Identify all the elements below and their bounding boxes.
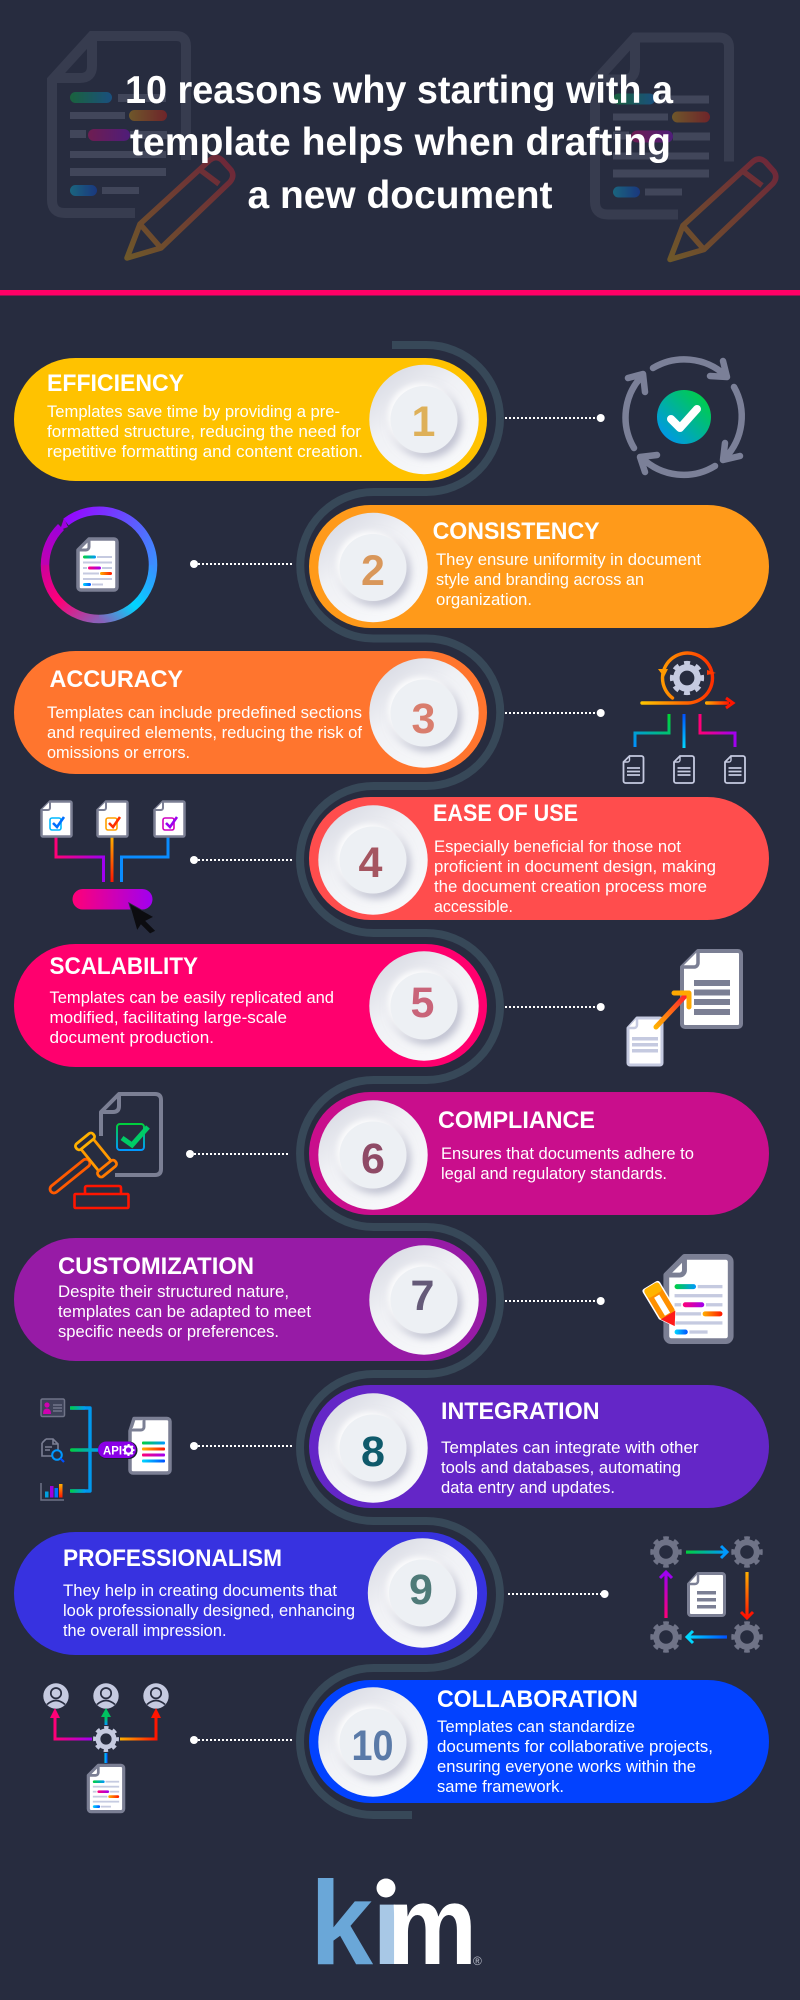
number disc 7 [369,1245,479,1355]
icon: API linking card, search and chart to document [41,1399,170,1500]
pink header rule [0,290,800,296]
body text: Templates can integrate with other [441,1439,699,1457]
body text: and required elements, reducing the risk of [47,724,362,742]
body text [441,1439,699,1497]
connector 10 [190,1736,294,1744]
connector 4 [190,856,294,864]
number 2: 2 [361,547,385,595]
connector 7 [505,1297,605,1305]
icon: gavel with approved document [38,1094,161,1208]
body text: Ensures that documents adhere to [441,1145,694,1163]
body text: Templates can standardize [437,1718,635,1736]
number 3: 3 [412,695,435,743]
body text: Templates can include predefined sections [47,704,362,722]
panel: customization [14,1238,487,1361]
icon: three checklists merging into a button with cursor [42,802,184,934]
logo: kim: k [310,1857,374,1990]
body text: templates can be adapted to meet [58,1303,311,1321]
connector 6 [186,1150,290,1158]
body text: tools and databases, automating [441,1459,681,1477]
number disc 2 [318,513,428,622]
number disc 6 [318,1100,428,1210]
connector 2 [190,560,294,568]
number disc 1 [369,365,479,474]
body text: legal and regulatory standards. [441,1165,667,1183]
icon: faded document and pencil, left [52,36,233,258]
icon: refresh cycle with check [626,359,742,475]
icon: API linking card, search and chart to document: API [103,1444,122,1458]
icon: small document scaling to large document [628,951,741,1065]
body text: Especially beneficial for those not [434,838,681,856]
connector 3 [505,709,605,717]
connector 1 [505,414,605,422]
heading: COLLABORATION [437,1686,638,1713]
logo: kim: m [387,1863,477,1988]
body text: omissions or errors. [47,744,190,762]
heading: ACCURACY [50,666,183,693]
number disc 9 [368,1538,477,1648]
body text: Templates save time by providing a pre- [47,403,340,421]
title: 10 reasons why starting with a [125,69,674,112]
connector 9 [508,1590,609,1598]
body text: formatted structure, reducing the need for [47,423,362,441]
panel: integration [309,1385,769,1508]
number 1: 1 [412,398,435,446]
panel: ease of use [309,797,769,920]
body text [58,1283,311,1341]
body text: the document creation process more [434,878,707,896]
body text [47,704,362,762]
panel: compliance [309,1092,769,1215]
body text: modified, facilitating large-scale [50,1009,287,1027]
body text: same framework. [437,1778,564,1796]
icon: document with pencil [641,1257,731,1341]
logo: kim: ® [473,1954,482,1968]
panel: scalability [14,944,487,1067]
number 6: 6 [361,1135,385,1183]
body text: ensuring everyone works within the [437,1758,696,1776]
heading: EFFICIENCY [47,370,184,397]
number 10: 10 [352,1722,394,1770]
body text: They ensure uniformity in document [436,551,701,569]
number disc 4 [318,805,428,915]
heading: INTEGRATION [441,1398,600,1425]
body text: proficient in document design, making [434,858,716,876]
heading: CONSISTENCY [433,518,600,545]
body text: document production. [50,1029,214,1047]
body text: style and branding across an [436,571,644,589]
body text: documents for collaborative projects, [437,1738,713,1756]
winding timeline path [300,345,500,1815]
number 4: 4 [359,839,383,887]
panel: consistency [309,505,769,628]
heading: EASE OF USE [433,800,578,827]
body text: Templates can be easily replicated and [50,989,334,1007]
heading: PROFESSIONALISM [63,1545,282,1572]
logo: kim: i [372,1863,403,1988]
body text: They help in creating documents that [63,1582,337,1600]
heading: COMPLIANCE [438,1107,595,1134]
number 5: 5 [411,979,434,1027]
icon: gear workflow branching to three documents [624,653,745,783]
panel: collaboration [309,1680,769,1803]
body text [47,403,363,461]
title: template helps when drafting [130,121,671,164]
icon: gradient ring with document [45,511,153,619]
title [125,69,674,217]
icon: faded document and pencil, right [595,38,776,260]
body text: the overall impression. [63,1622,226,1640]
body text: organization. [436,591,532,609]
icon: four gears cycling around a document [652,1538,761,1651]
body text [441,1145,694,1183]
body text: Despite their structured nature, [58,1283,289,1301]
number disc 10 [318,1687,428,1797]
number disc 8 [318,1393,428,1503]
number 7: 7 [411,1272,434,1320]
body text: look professionally designed, enhancing [63,1602,355,1620]
connector 8 [190,1442,294,1450]
body text: repetitive formatting and content creation. [47,443,363,461]
body text [63,1582,355,1640]
heading: SCALABILITY [50,953,198,980]
panel: professionalism [14,1532,487,1655]
body text: data entry and updates. [441,1479,615,1497]
icon: document shared to three people via gear [43,1683,169,1812]
connector 5 [505,1003,605,1011]
panel: accuracy [14,651,487,774]
heading: CUSTOMIZATION [58,1253,254,1280]
logo: kim [310,1857,482,1990]
body text [437,1718,713,1796]
number disc 5 [369,951,479,1061]
title: a new document [248,174,553,217]
body text: accessible. [434,898,513,916]
number disc 3 [369,658,479,768]
panel: efficiency [14,358,487,481]
number 8: 8 [361,1428,385,1476]
body text [436,551,701,609]
body text [50,989,334,1047]
body text: specific needs or preferences. [58,1323,279,1341]
body text [434,838,716,916]
number 9: 9 [409,1566,433,1614]
